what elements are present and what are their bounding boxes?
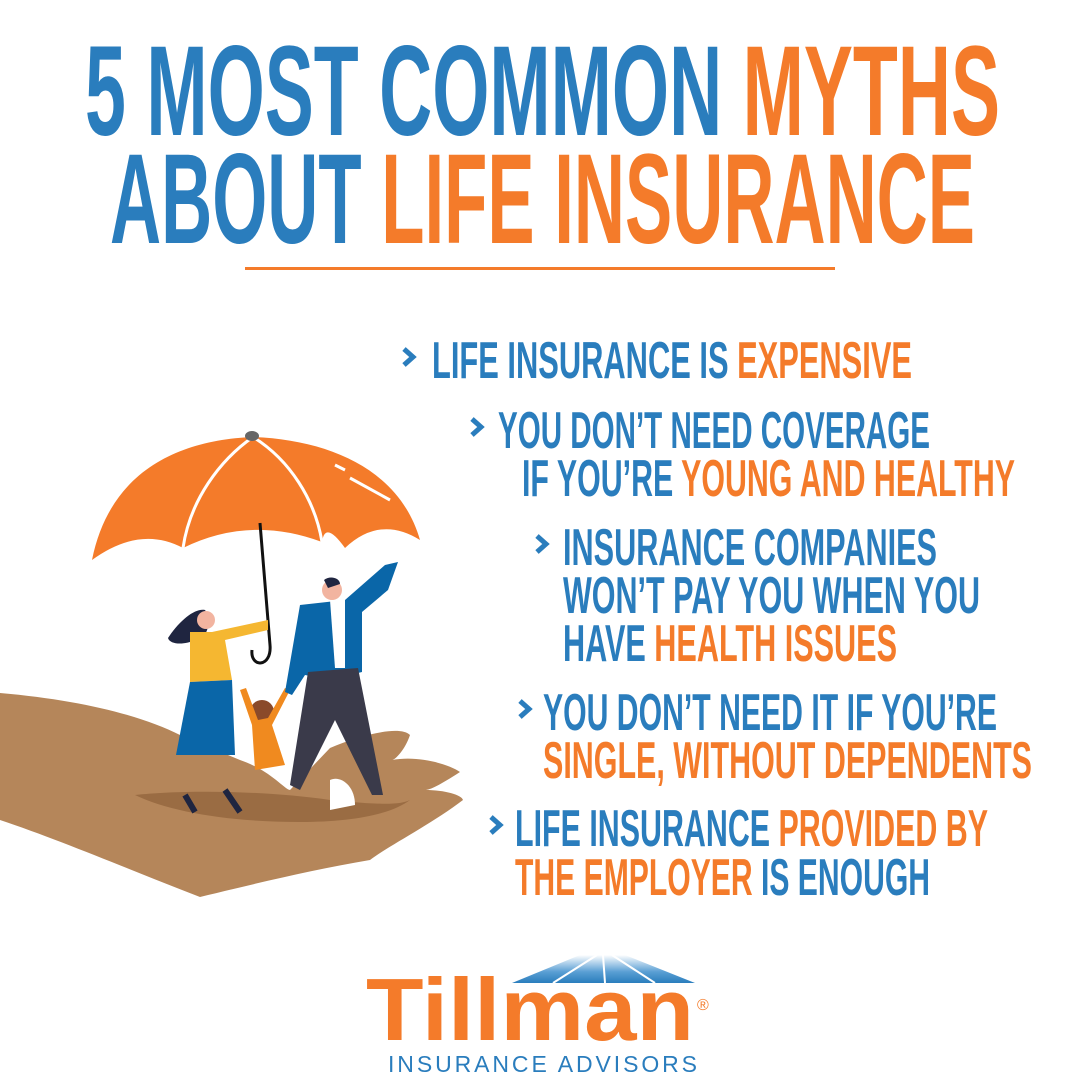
child bbox=[240, 688, 290, 770]
umbrella bbox=[92, 431, 420, 663]
logo: ® bbox=[697, 997, 709, 1014]
myth list bbox=[404, 332, 1032, 907]
logo roof bbox=[512, 955, 695, 983]
man bbox=[285, 562, 398, 810]
illustration: family under umbrella in hand bbox=[0, 431, 463, 897]
myth 3 bbox=[537, 519, 980, 673]
myth 2 bbox=[472, 402, 1015, 508]
logo: INSURANCE ADVISORS bbox=[388, 1051, 697, 1077]
myth 1: LIFE INSURANCE IS EXPENSIVE bbox=[432, 332, 912, 390]
myth 3: HAVE HEALTH ISSUES bbox=[563, 615, 897, 673]
myth 5: THE EMPLOYER IS ENOUGH bbox=[515, 849, 930, 907]
myth 5 bbox=[491, 800, 988, 907]
myth 4 bbox=[520, 684, 1032, 790]
woman bbox=[168, 610, 268, 812]
title bbox=[85, 20, 1000, 271]
logo: Tillman bbox=[366, 960, 694, 1059]
hand bbox=[0, 693, 463, 897]
